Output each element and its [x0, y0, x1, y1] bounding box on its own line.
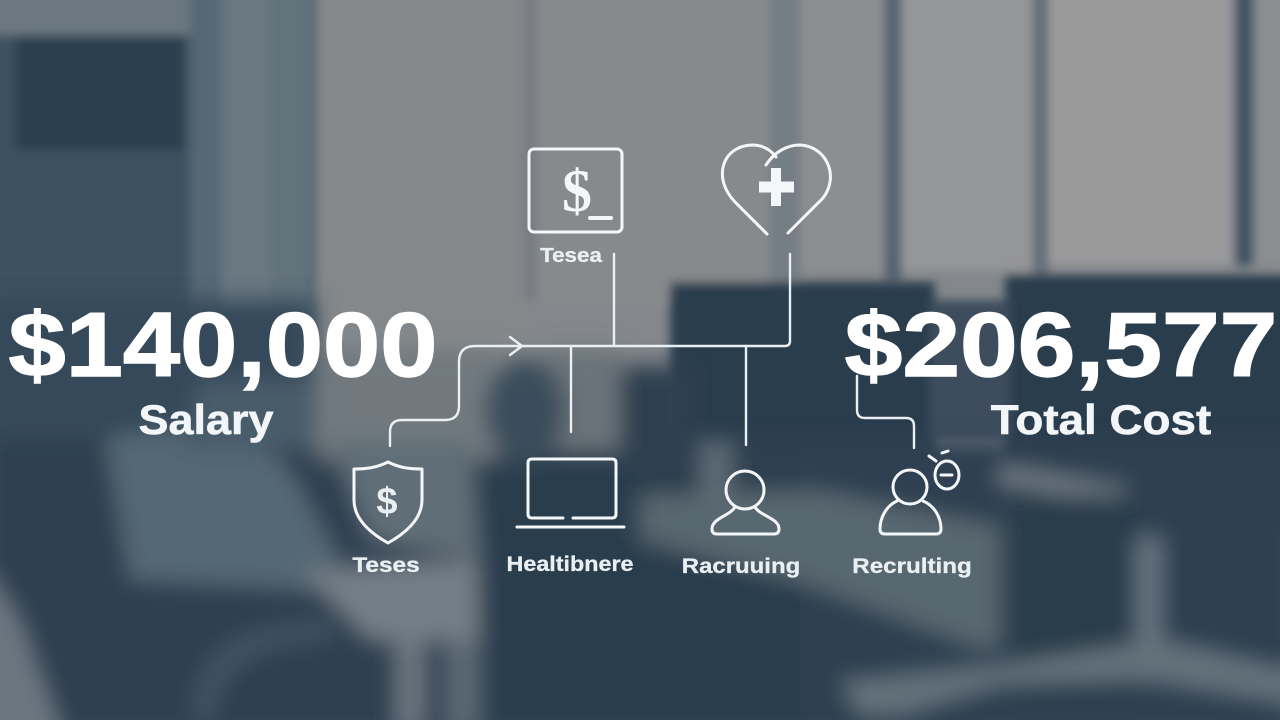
icon: person	[712, 471, 779, 534]
label: recruiting two: Recrulting	[852, 555, 972, 578]
connector network	[390, 254, 914, 448]
label: top taxes icon: Tesea	[540, 245, 602, 267]
heading: total cost amount: $206,577	[845, 295, 1277, 396]
icon: tax document with dollar	[529, 149, 622, 232]
icon: shield with dollar: $	[376, 481, 398, 523]
label: recruiting one: Racruuing	[682, 555, 800, 578]
icon: person with coin	[880, 451, 959, 534]
icon: laptop	[517, 459, 624, 527]
icon: heart with plus	[722, 145, 830, 234]
label: total cost: Total Cost	[991, 396, 1211, 443]
label: taxes: Teses	[352, 554, 420, 577]
label: healthcare: Healtibnere	[507, 553, 633, 576]
label: salary: Salary	[139, 396, 273, 443]
heading: salary amount: $140,000	[9, 295, 437, 396]
icon: shield with dollar	[354, 462, 422, 543]
icon: tax document with dollar: $	[562, 158, 592, 224]
